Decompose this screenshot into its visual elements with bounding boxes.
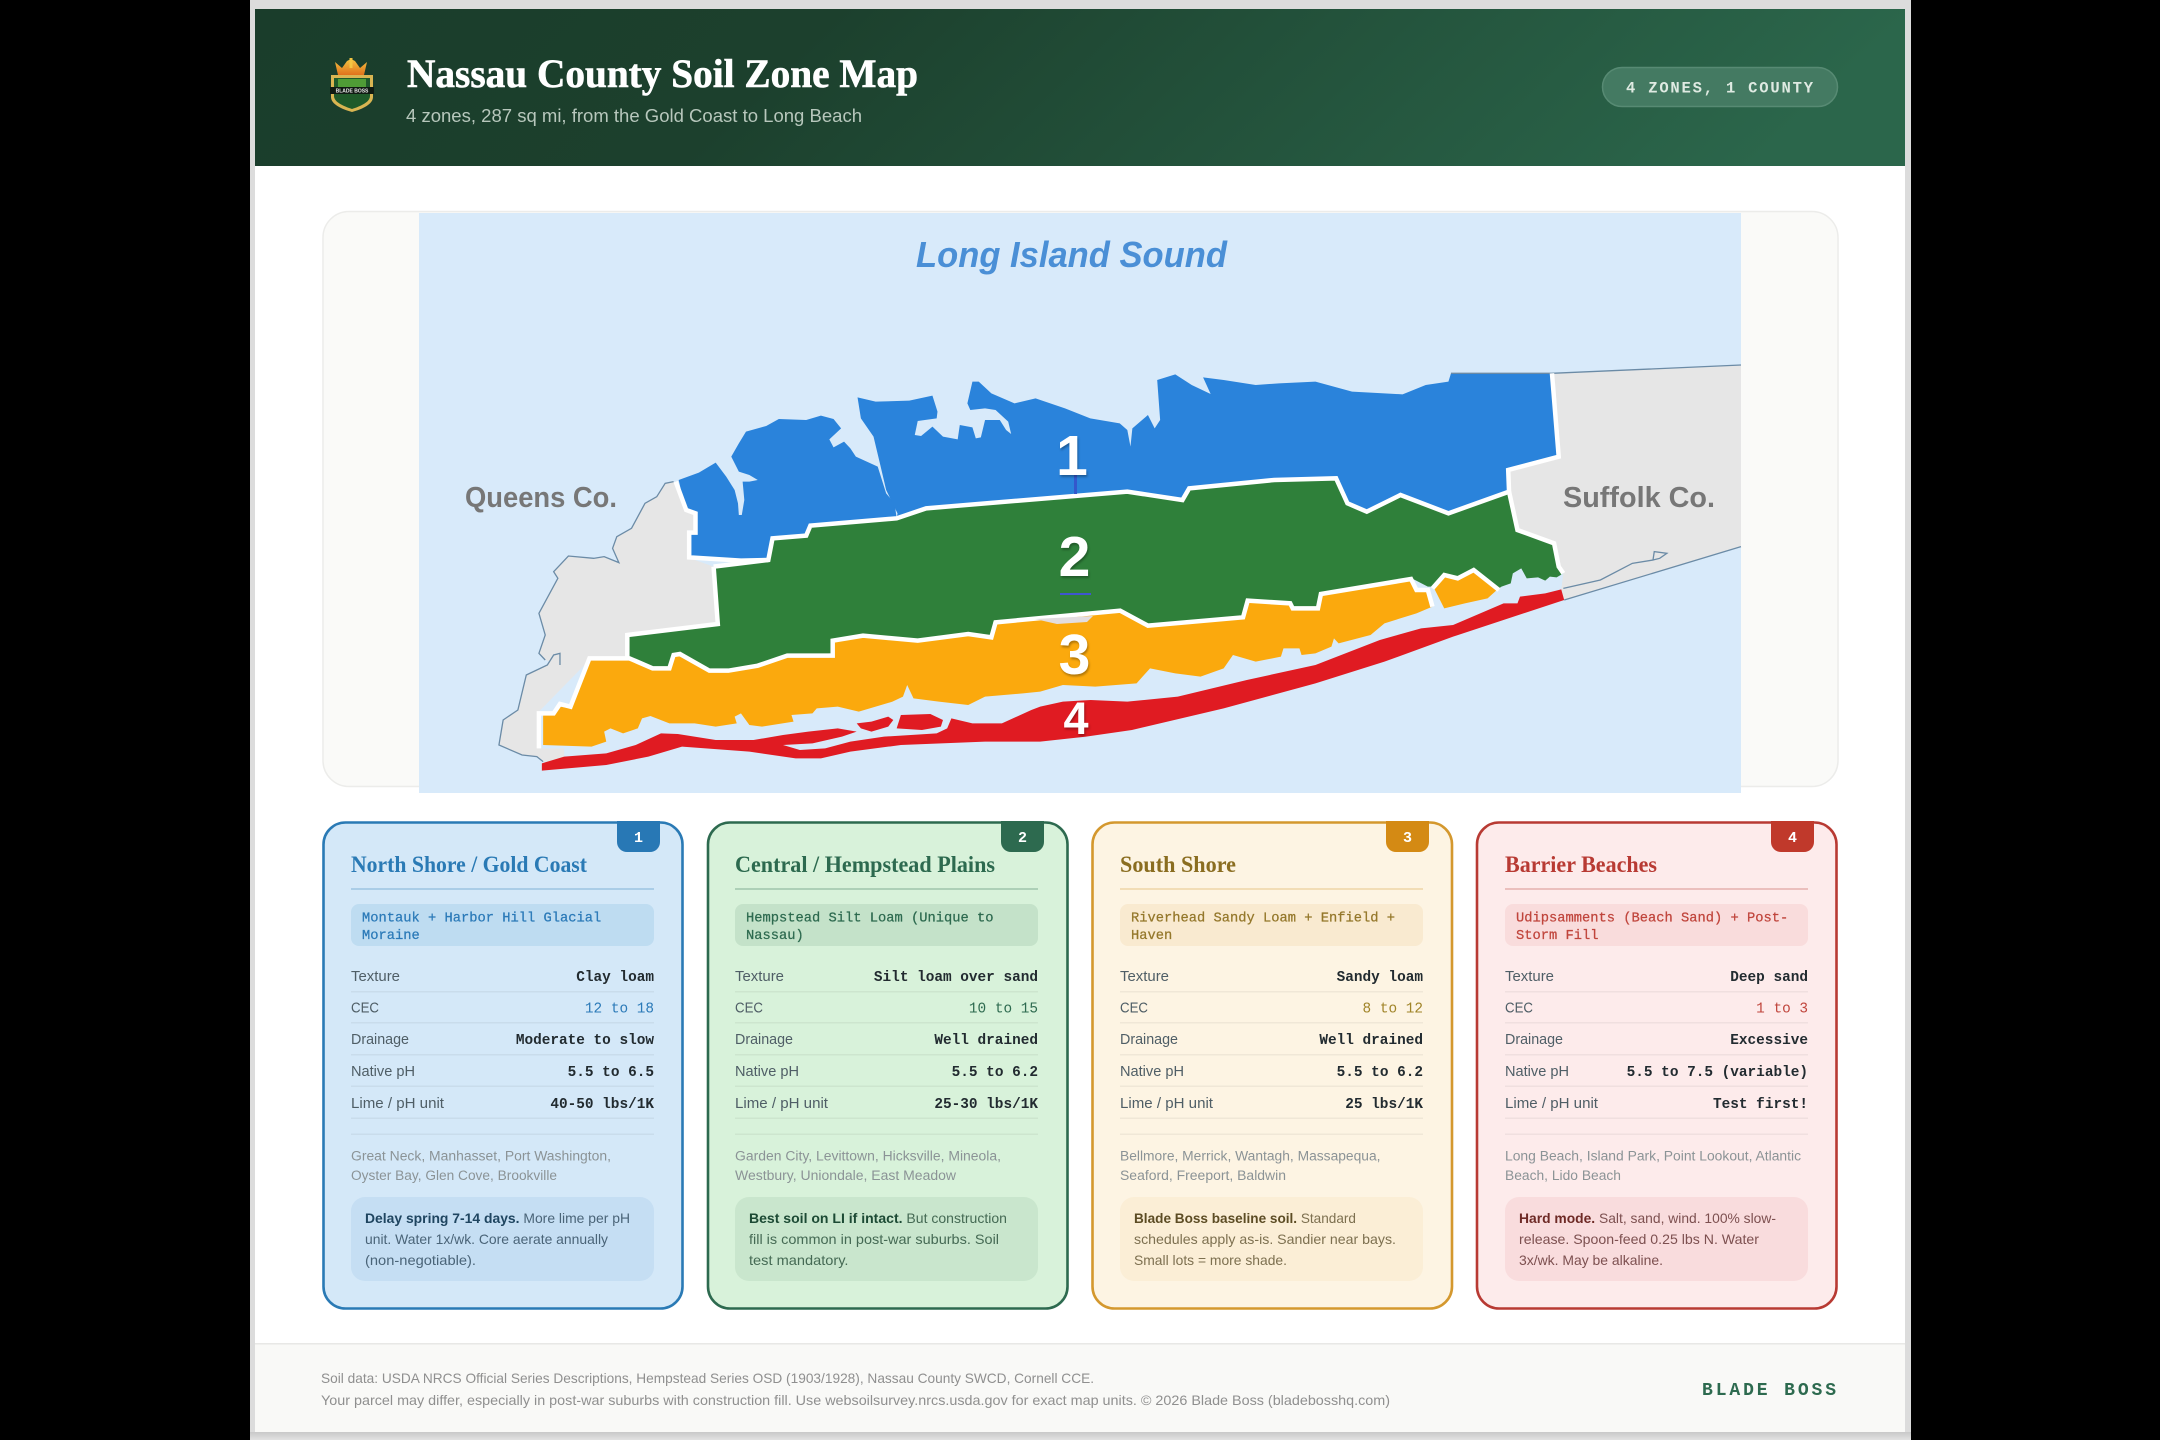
- subtitle: 4 zones, 287 sq mi, from the Gold Coast to Long Beach: [406, 106, 862, 126]
- data rows: Excessive: [1730, 1033, 1808, 1049]
- data rows: Silt loam over sand: [874, 970, 1038, 986]
- soil series chip: Riverhead Sandy Loam + Enfield +: [1131, 910, 1395, 926]
- badge 3: 3: [1403, 830, 1412, 847]
- data rows: Well drained: [1319, 1033, 1423, 1049]
- towns: Long Beach, Island Park, Point Lookout, Atlantic: [1505, 1148, 1801, 1164]
- data rows: 1 to 3: [1756, 1002, 1808, 1018]
- card background: [708, 822, 1068, 1308]
- zone number 1: 1: [1056, 424, 1088, 488]
- footer source text: Your parcel may differ, especially in post-war suburbs with construction fill. Use websoilsurvey.nrcs.usda.gov for exact map units. © 2026 Blade Boss (bladebosshq.com): [321, 1393, 1390, 1408]
- data rows: [735, 969, 1038, 1135]
- badge 2: 2: [1018, 830, 1027, 847]
- care note: Best soil on LI if intact. But construction: [749, 1211, 1007, 1226]
- care note: release. Spoon-feed 0.25 lbs N. Water: [1519, 1232, 1759, 1247]
- care note: [351, 1197, 654, 1281]
- footer band: [255, 1343, 1905, 1432]
- data rows: 10 to 15: [969, 1002, 1038, 1018]
- badge 1: [617, 821, 660, 852]
- pill: 4 zones, 1 county: [1602, 68, 1838, 106]
- footer source text: [321, 1371, 1390, 1408]
- care note: Small lots = more shade.: [1134, 1253, 1287, 1268]
- card background: [1477, 822, 1836, 1308]
- zone number 4: 4: [1063, 693, 1089, 744]
- soil series chip: Moraine: [362, 928, 420, 944]
- soil series chip: [1505, 904, 1808, 946]
- card background: [1092, 822, 1452, 1308]
- care note: [1120, 1197, 1423, 1281]
- towns: [1505, 1148, 1801, 1183]
- data rows: Native pH: [735, 1064, 799, 1080]
- care note: [735, 1197, 1038, 1281]
- data rows: Drainage: [1120, 1032, 1178, 1048]
- panel: zone 2 Central / Hempstead Plains: [708, 821, 1068, 1308]
- data rows: 5.5 to 6.2: [952, 1065, 1038, 1081]
- soil series chip: Haven: [1131, 929, 1172, 944]
- care note: Hard mode. Salt, sand, wind. 100% slow-: [1519, 1211, 1776, 1226]
- soil series chip: [351, 904, 654, 946]
- zone 2: Central: [629, 478, 1563, 670]
- data rows: 25-30 lbs/1K: [934, 1097, 1038, 1113]
- zone 4: Barrier Beaches: [542, 589, 1564, 771]
- data rows: 5.5 to 6.2: [1337, 1065, 1423, 1081]
- soil series chip: Nassau): [746, 928, 804, 944]
- data rows: [351, 969, 654, 1135]
- data rows: CEC: [1505, 1001, 1533, 1017]
- land: Queens County: [499, 482, 718, 762]
- data rows: Moderate to slow: [516, 1033, 654, 1049]
- towns: Bellmore, Merrick, Wantagh, Massapequa,: [1120, 1148, 1380, 1164]
- care note: (non-negotiable).: [365, 1253, 476, 1268]
- soil series chip: [735, 904, 1038, 946]
- data rows: Texture: [1505, 969, 1554, 985]
- data rows: Texture: [351, 969, 400, 985]
- care note: unit. Water 1x/wk. Core aerate annually: [365, 1232, 608, 1247]
- data rows: Lime / pH unit: [351, 1096, 444, 1112]
- heading: North Shore / Gold Coast: [351, 852, 587, 878]
- data rows: Drainage: [351, 1032, 409, 1048]
- data rows: Native pH: [351, 1064, 415, 1080]
- icon: Blade Boss shield logo: BLADE BOSS: [336, 88, 369, 94]
- data rows: CEC: [1120, 1001, 1148, 1017]
- data rows: Lime / pH unit: [1505, 1096, 1598, 1112]
- zone 1: North Shore: [679, 373, 1559, 560]
- towns: [351, 1148, 611, 1183]
- panel: zone 4 Barrier Beaches: [1477, 821, 1836, 1308]
- soil series chip: [1120, 904, 1423, 946]
- data rows: 12 to 18: [585, 1002, 654, 1018]
- towns: Beach, Lido Beach: [1505, 1168, 1621, 1183]
- towns: Garden City, Levittown, Hicksville, Mineola,: [735, 1148, 1001, 1164]
- care note: Blade Boss baseline soil. Standard: [1134, 1211, 1356, 1226]
- soil series chip: Udipsamments (Beach Sand) + Post-: [1516, 910, 1788, 926]
- data rows: Sandy loam: [1337, 970, 1423, 986]
- badge 2: [1001, 821, 1044, 852]
- care note: fill is common in post-war suburbs. Soil: [749, 1232, 999, 1247]
- pill: 4 zones, 1 county: 4 ZONES, 1 COUNTY: [1626, 80, 1814, 98]
- icon: Blade Boss shield logo: [330, 58, 374, 112]
- label: Suffolk Co.: Suffolk Co.: [1563, 482, 1715, 514]
- towns: Oyster Bay, Glen Cove, Brookville: [351, 1168, 557, 1183]
- care note: test mandatory.: [749, 1253, 848, 1268]
- soil series chip: Montauk + Harbor Hill Glacial: [362, 910, 601, 926]
- soil series chip: Hempstead Silt Loam (Unique to: [746, 910, 994, 926]
- panel: zone 1 North Shore / Gold Coast: [324, 821, 682, 1308]
- map: land geometry: [499, 365, 1741, 771]
- map: white zone boundaries: [539, 373, 1563, 748]
- care note: schedules apply as-is. Sandier near bays.: [1134, 1232, 1396, 1247]
- land: Suffolk County: [1508, 365, 1741, 600]
- badge 4: 4: [1788, 830, 1797, 847]
- data rows: 5.5 to 7.5 (variable): [1627, 1065, 1808, 1081]
- data rows: Drainage: [735, 1032, 793, 1048]
- care note: [1505, 1197, 1808, 1281]
- badge 4: [1771, 821, 1814, 852]
- towns: [735, 1148, 1001, 1183]
- data rows: Native pH: [1505, 1064, 1569, 1080]
- zone number 3: 3: [1059, 623, 1090, 687]
- data rows: Texture: [1120, 969, 1169, 985]
- footer source text: Soil data: USDA NRCS Official Series Descriptions, Hempstead Series OSD (1903/1928), Nassau County SWCD, Cornell CCE.: [321, 1371, 1094, 1386]
- data rows: 25 lbs/1K: [1345, 1097, 1423, 1113]
- map artefact marks: [1074, 475, 1077, 494]
- data rows: Well drained: [934, 1033, 1038, 1049]
- title: Nassau County Soil Zone Map: [407, 51, 918, 96]
- data rows: [1505, 969, 1808, 1135]
- card background: [324, 822, 682, 1308]
- data rows: Deep sand: [1730, 970, 1808, 986]
- data rows: Native pH: [1120, 1064, 1184, 1080]
- care note: 3x/wk. May be alkaline.: [1519, 1253, 1663, 1268]
- data rows: CEC: [351, 1001, 379, 1017]
- heading: Barrier Beaches: [1505, 852, 1657, 878]
- data rows: 5.5 to 6.5: [568, 1065, 654, 1081]
- data rows: [1120, 969, 1423, 1135]
- data rows: Lime / pH unit: [1120, 1096, 1213, 1112]
- data rows: 8 to 12: [1363, 1002, 1423, 1018]
- heading: Central / Hempstead Plains: [735, 852, 995, 878]
- zone number 2: 2: [1059, 525, 1090, 589]
- panel: zone 3 South Shore: [1092, 821, 1452, 1308]
- data rows: Clay loam: [576, 970, 654, 986]
- zone 3: South Shore: [543, 570, 1497, 747]
- soil series chip: Storm Fill: [1516, 928, 1599, 944]
- label: Queens Co.: Queens Co.: [465, 482, 617, 514]
- data rows: Test first!: [1713, 1097, 1808, 1113]
- data rows: Texture: [735, 969, 784, 985]
- care note: Delay spring 7-14 days. More lime per pH: [365, 1211, 630, 1226]
- towns: [1120, 1148, 1380, 1183]
- footer brand: BLADE BOSS: [1702, 1381, 1836, 1401]
- heading: South Shore: [1120, 852, 1236, 878]
- data rows: Drainage: [1505, 1032, 1563, 1048]
- towns: Great Neck, Manhasset, Port Washington,: [351, 1148, 611, 1164]
- data rows: CEC: [735, 1001, 763, 1017]
- header band: [255, 9, 1905, 166]
- towns: Seaford, Freeport, Baldwin: [1120, 1168, 1286, 1183]
- towns: Westbury, Uniondale, East Meadow: [735, 1168, 956, 1183]
- map: sea background: [419, 213, 1741, 793]
- badge 3: [1386, 821, 1429, 852]
- panel: map container: [323, 212, 1838, 793]
- label: Long Island Sound: Long Island Sound: [916, 234, 1228, 275]
- map: coastline strokes: [499, 365, 1741, 762]
- badge 1: 1: [634, 830, 643, 847]
- data rows: Lime / pH unit: [735, 1096, 828, 1112]
- data rows: 40-50 lbs/1K: [550, 1097, 654, 1113]
